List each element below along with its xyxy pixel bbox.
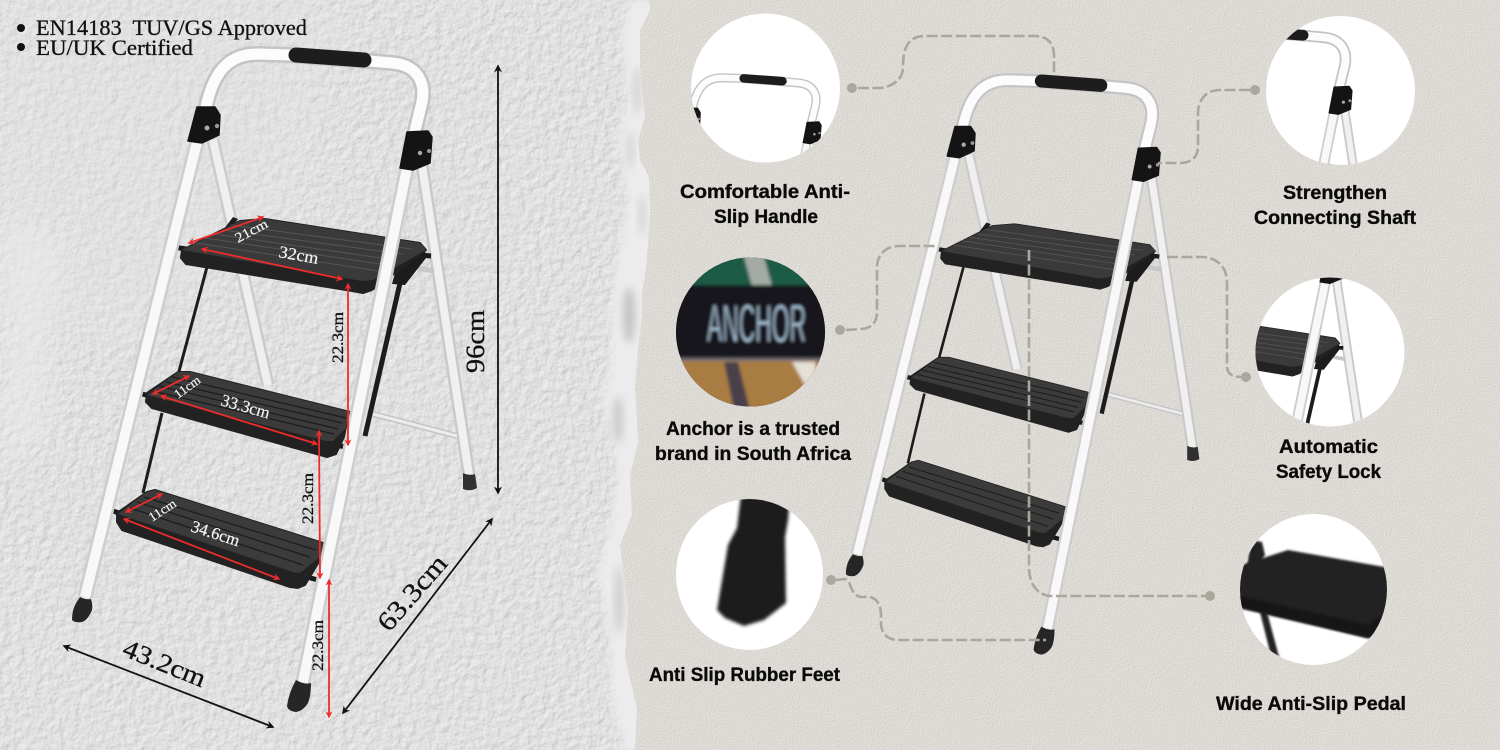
dimension: middle step 11cm depth (153, 372, 203, 401)
connector: feet (826, 575, 1046, 640)
connector: safety lock (1167, 257, 1251, 382)
label: shaft: Strengthen (1283, 182, 1387, 204)
circle: Anchor brand detail (676, 258, 825, 406)
connector: shaft (1158, 85, 1260, 163)
label: safety lock: Automatic (1279, 436, 1378, 458)
label: handle (680, 181, 850, 228)
dimension: top step 32cm width (202, 242, 342, 279)
circle: rubber foot detail (676, 495, 823, 650)
text block: certifications: EU/UK Certified (36, 35, 193, 60)
circle: safety lock detail (1256, 278, 1404, 426)
dimension: depth 63.3cm (343, 519, 492, 713)
dimension: bottom step 34.6cm width (124, 517, 279, 579)
label: brand (655, 418, 851, 465)
dimension: middle step 33.3cm width (161, 391, 317, 444)
connector: handle (847, 36, 1054, 93)
main ladder illustration (846, 80, 1199, 655)
label: pedal: Wide Anti-Slip Pedal (1216, 693, 1406, 715)
dimension: top step 32cm width: 32cm (277, 242, 320, 268)
label: safety lock (1276, 436, 1381, 483)
label: safety lock: Safety Lock (1276, 461, 1381, 483)
label: handle: Slip Handle (714, 206, 818, 228)
dimension: step spacing 22.3cm upper: 22.3cm (330, 311, 347, 363)
dimension: height 96cm: 96cm (461, 310, 490, 373)
text block: certifications: EN14183 TUV/GS Approved (36, 15, 307, 40)
text block: certifications (17, 15, 307, 60)
dimension: top step 21cm depth: 21cm (233, 217, 271, 247)
dimension: middle step 11cm depth: 11cm (171, 372, 203, 401)
circle: connecting shaft detail (1266, 16, 1415, 165)
dimension: middle step 33.3cm width: 33.3cm (219, 391, 272, 423)
dimension: ground clearance 22.3cm (310, 580, 329, 717)
label: brand: Anchor is a trusted (666, 418, 840, 440)
dimension: bottom step 34.6cm width: 34.6cm (189, 517, 242, 550)
dimension: step spacing 22.3cm lower: 22.3cm (300, 472, 317, 524)
label: feet: Anti Slip Rubber Feet (649, 664, 840, 686)
ladder with dimensions (72, 54, 477, 712)
label: brand: brand in South Africa (655, 443, 851, 465)
dimension: bottom step 11cm depth: 11cm (145, 496, 179, 525)
label: handle: Comfortable Anti- (680, 181, 850, 203)
dimension: bottom step 11cm depth (126, 494, 179, 525)
dimension: width 43.2cm (64, 634, 273, 727)
circle: Anchor brand detail: ANCHOR (707, 294, 806, 354)
connector: pedal (1029, 250, 1215, 601)
label: shaft (1254, 182, 1416, 229)
panel: left torn paper (0, 0, 660, 750)
circle: wide pedal detail (1238, 514, 1390, 668)
dimension: depth 63.3cm: 63.3cm (371, 549, 453, 637)
label: shaft: Connecting Shaft (1254, 207, 1416, 229)
dimension: top step 21cm depth (189, 217, 271, 247)
circle: handle detail (691, 14, 840, 162)
dimension: width 43.2cm: 43.2cm (119, 634, 210, 693)
dimension: ground clearance 22.3cm: 22.3cm (310, 619, 327, 671)
connector: brand (835, 246, 937, 335)
